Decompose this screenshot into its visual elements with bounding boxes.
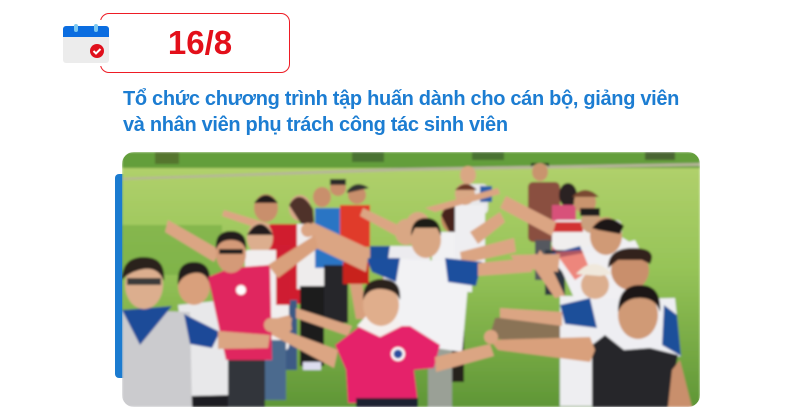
- heading: Tổ chức chương trình tập huấn dành cho cán bộ, giảng viên: [123, 88, 679, 110]
- raised arms in the middle rows: [165, 219, 516, 400]
- photo: group of staff in a park with raised hands: [122, 152, 700, 407]
- man in white polo: [312, 218, 541, 407]
- heading: [123, 88, 679, 136]
- date: 16/8: [168, 24, 232, 61]
- icon: calendar: [63, 20, 109, 66]
- woman with white cap and men behind on the right: [500, 217, 681, 406]
- back row people: [222, 163, 636, 382]
- lawn background: [122, 152, 700, 407]
- woman in pink polo at centre: [264, 279, 494, 407]
- date box: [100, 13, 290, 73]
- woman and man at the far left: [178, 262, 292, 407]
- man in white and blue at front left: [122, 257, 270, 407]
- accent bar: [115, 174, 127, 378]
- man in black tank top: [484, 285, 692, 407]
- heading: và nhân viên phụ trách công tác sinh viên: [123, 114, 508, 136]
- man in pink polo: [208, 223, 318, 407]
